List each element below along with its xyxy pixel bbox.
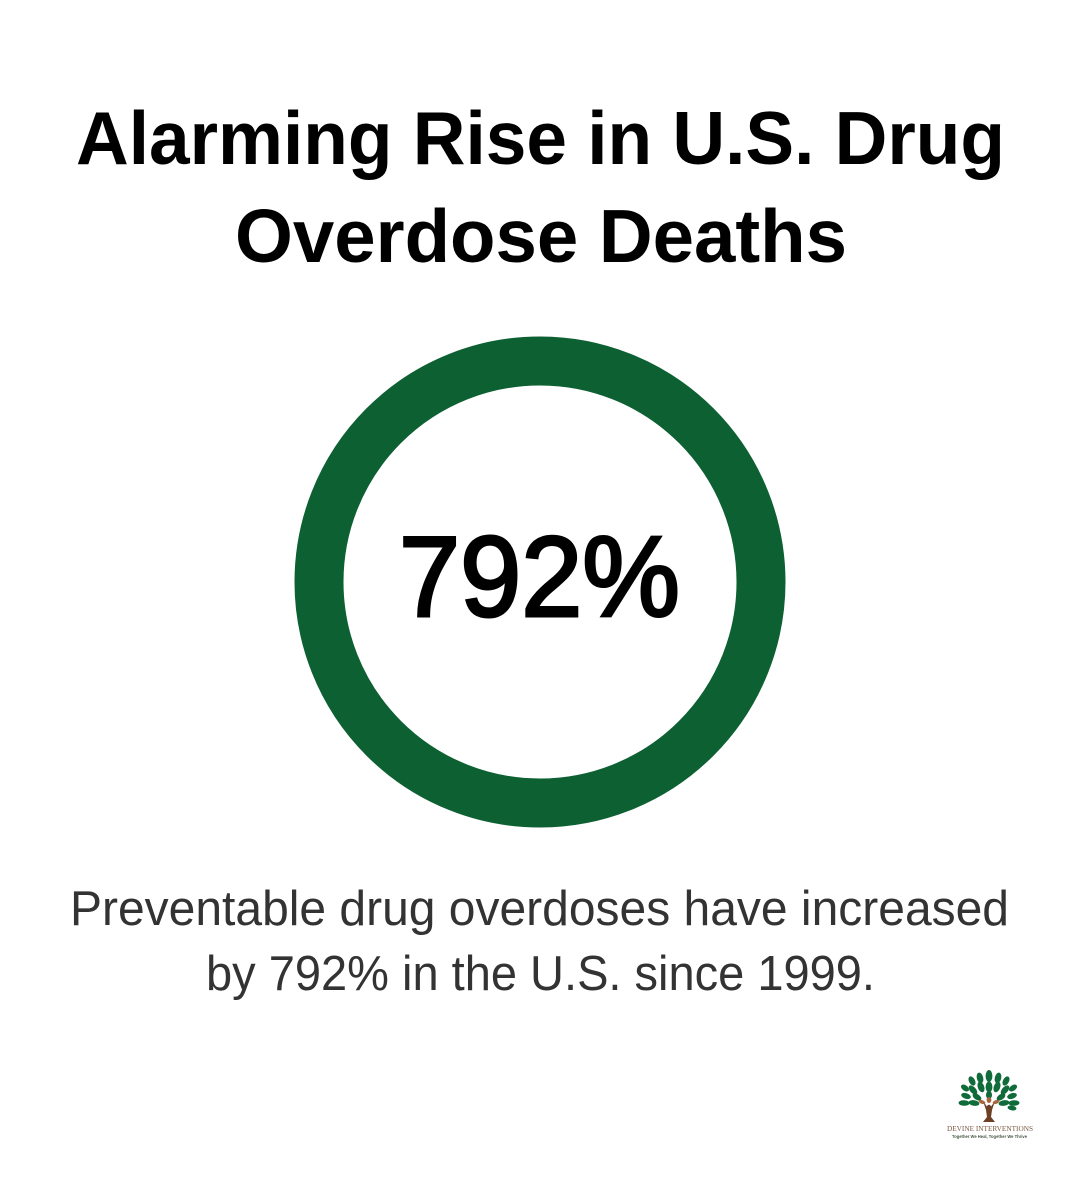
description text: Preventable drug overdoses have increased [70, 882, 1009, 936]
logo: Devine Interventions [947, 1070, 1033, 1139]
title: Overdose Deaths [235, 194, 847, 278]
logo name: DEVINE INTERVENTIONS [947, 1125, 1033, 1133]
title [76, 96, 1005, 278]
icon: tree leaves [958, 1070, 1020, 1111]
statistic: 792%: 792% [399, 514, 680, 641]
description text [70, 882, 1009, 1001]
donut ring [319, 361, 761, 803]
description text: by 792% in the U.S. since 1999. [206, 947, 875, 1001]
logo tagline: Together We Heal, Together We Thrive [952, 1134, 1027, 1139]
icon: tree figure [978, 1097, 1000, 1122]
title: Alarming Rise in U.S. Drug [76, 96, 1005, 180]
